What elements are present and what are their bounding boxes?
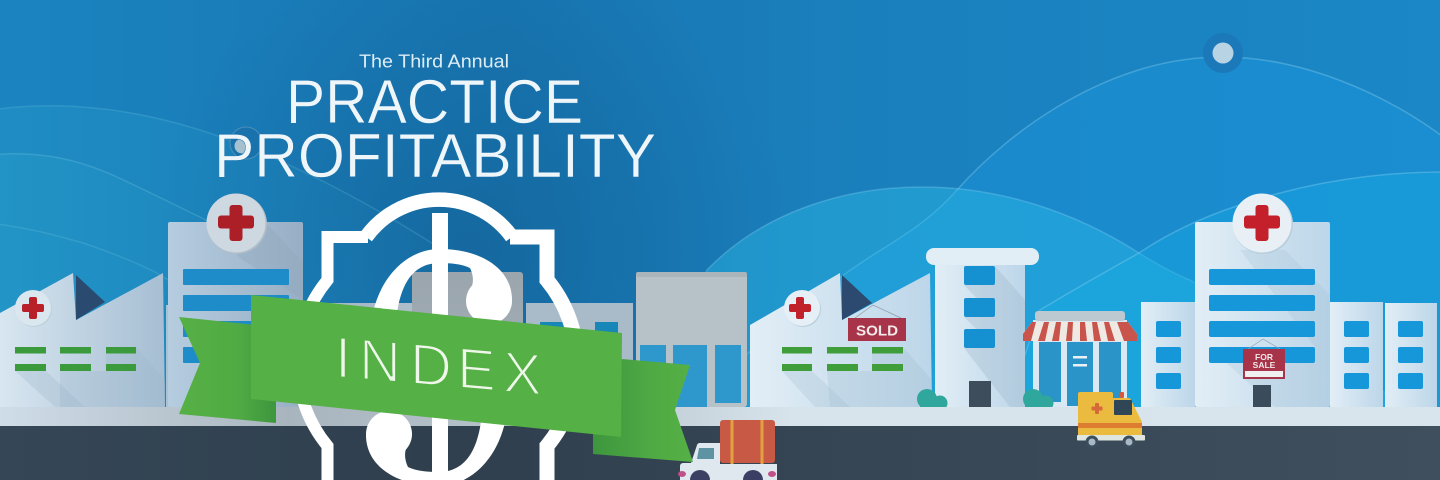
title: [214, 50, 656, 191]
ribbon left tail: [179, 317, 276, 423]
dollar sign: [366, 213, 512, 480]
hospital windows: [1156, 269, 1423, 389]
sidewalk: [0, 407, 1440, 426]
hospital door: [1253, 385, 1271, 407]
green ribbon banner: [179, 295, 693, 462]
title kicker: The Third Annual: [359, 50, 509, 72]
tall building door: [969, 381, 991, 407]
hospital medical badge: [206, 194, 267, 254]
right factory with sold sign: [750, 273, 932, 407]
ambulance: [1077, 392, 1145, 448]
left hospital building: [166, 194, 412, 407]
location marker: behind title: [230, 127, 262, 159]
background hills: left: [0, 106, 520, 420]
location marker: top right: [1203, 33, 1243, 73]
right tall building: [926, 248, 1039, 407]
badge outline: [298, 200, 577, 480]
title line two: PROFITABILITY: [214, 122, 656, 191]
storefront glass: [640, 345, 741, 408]
index label: INDEX: [335, 325, 542, 408]
for sale sign: [1243, 339, 1285, 379]
factory green windows: [15, 347, 136, 371]
hospital windows: [183, 269, 289, 363]
right hospital with for-sale sign: [1141, 194, 1437, 407]
hospital medical badge: [1232, 194, 1293, 254]
gray storefront building: [636, 272, 747, 408]
delivery truck: [678, 420, 777, 480]
bushes: [917, 389, 1054, 410]
centre gray building: [397, 272, 633, 407]
awning: [1023, 322, 1137, 341]
factory roof shade: [842, 275, 872, 320]
factory medical badge: [784, 290, 821, 327]
road: [0, 426, 1440, 480]
factory roof shade: [76, 275, 105, 320]
for sale sign: FOR: [1255, 352, 1273, 362]
tall building windows: [964, 266, 995, 348]
shop with striped awning: [1023, 311, 1137, 407]
for sale sign: SALE: [1253, 360, 1276, 370]
ribbon main band: [251, 295, 622, 437]
factory medical badge: [15, 290, 52, 327]
ribbon right tail: [593, 359, 693, 462]
sold sign: SOLD: [856, 322, 898, 340]
sold sign: [848, 305, 906, 341]
dollar badge emblem: [298, 200, 577, 480]
title line one: PRACTICE: [286, 68, 583, 137]
factory green windows: [782, 347, 903, 371]
shop door handles: [1073, 356, 1087, 366]
left factory building: [0, 273, 165, 407]
background hills: right: [640, 57, 1440, 430]
shop glass: [1039, 342, 1121, 406]
